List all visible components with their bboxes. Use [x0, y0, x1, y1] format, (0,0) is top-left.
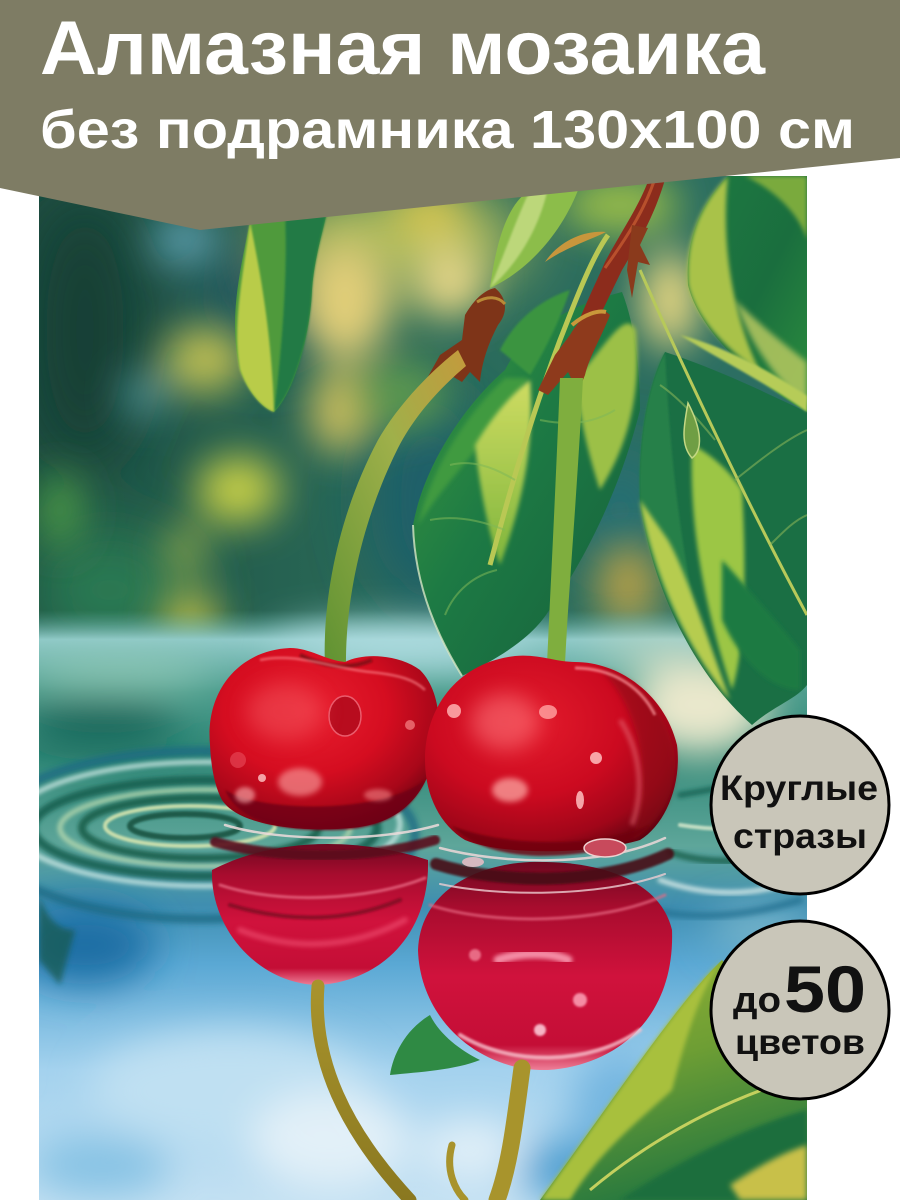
badge: up to 50 colours: [711, 921, 889, 1099]
leaf: bottom right: [540, 960, 807, 1200]
reflected stems: [317, 986, 522, 1200]
leaf: large centre: [413, 235, 640, 676]
leaf: top left: [235, 212, 327, 412]
cherry reflection: right: [418, 862, 672, 1070]
cherry: right: [425, 656, 678, 856]
leaf: top right: [688, 176, 807, 412]
stem: left cherry: [325, 350, 466, 668]
badge: up to 50 colours: до: [733, 979, 781, 1020]
badge: round rhinestones: [711, 716, 889, 894]
water ripples: [0, 751, 800, 919]
header banner: [0, 0, 900, 230]
stem: right cherry: [547, 378, 583, 664]
subtitle: без подрамника 130х100 см: [40, 100, 855, 160]
cherry reflection: left: [212, 844, 428, 985]
badge: up to 50 colours: цветов: [735, 1023, 865, 1062]
waterline between cherries and reflections: [215, 825, 668, 893]
leaf: top centre: [490, 184, 580, 288]
cherry: left: [210, 648, 439, 830]
blurred garden background: [25, 175, 807, 676]
leaf: large right: [640, 270, 807, 725]
badge: round rhinestones: стразы: [733, 817, 867, 856]
icon: water drop on leaf: [684, 403, 699, 458]
water surface: [15, 610, 810, 1200]
badge: round rhinestones: Круглые: [720, 769, 878, 808]
painting: cherries over water: [0, 175, 810, 1200]
badge: up to 50 colours: 50: [784, 952, 866, 1026]
title: Алмазная мозаика: [40, 6, 766, 91]
branch and buds: [425, 176, 666, 395]
leaf: small reflected: [390, 1015, 480, 1075]
